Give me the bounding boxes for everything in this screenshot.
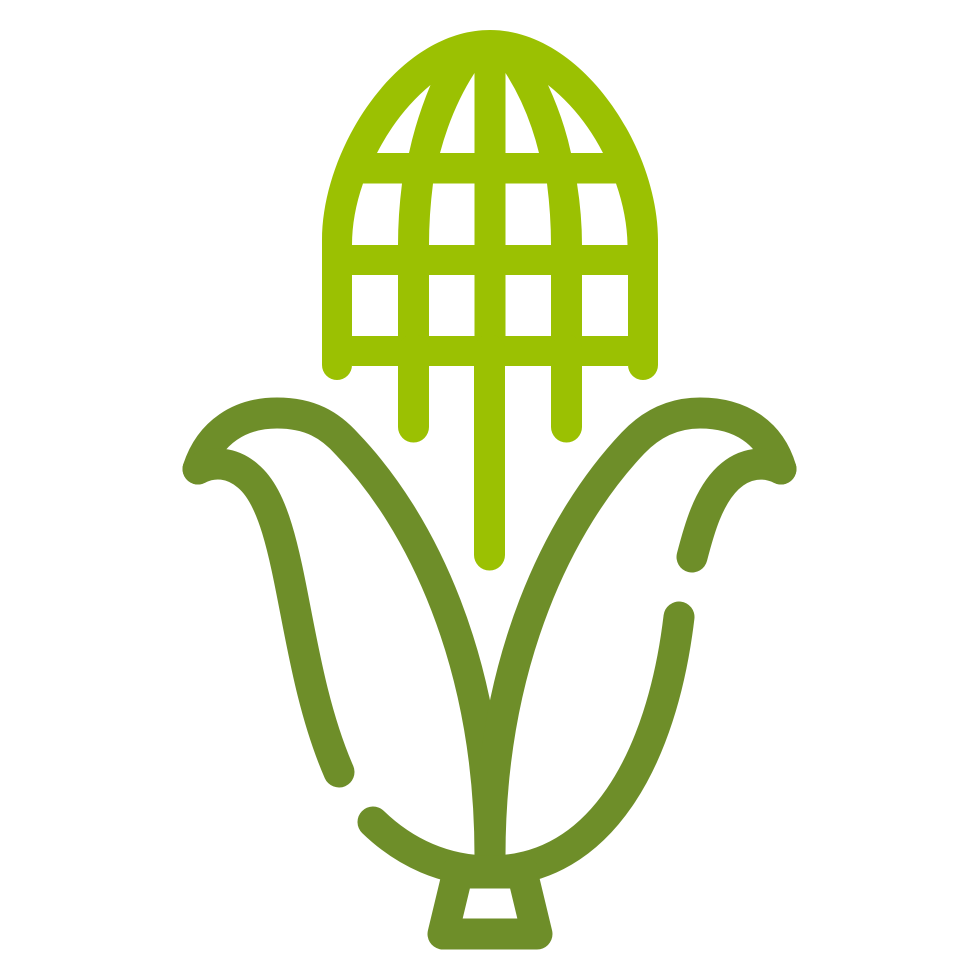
corn cob grid: [322, 30, 658, 555]
husk base: [443, 873, 537, 934]
left leaf inner fold: [198, 464, 339, 772]
right leaf inner fold: [692, 464, 781, 557]
right leaf outer blade: [490, 413, 781, 856]
left leaf outer blade: [198, 413, 490, 856]
husk leaves: [198, 413, 781, 934]
lower husk curve: [373, 617, 679, 871]
